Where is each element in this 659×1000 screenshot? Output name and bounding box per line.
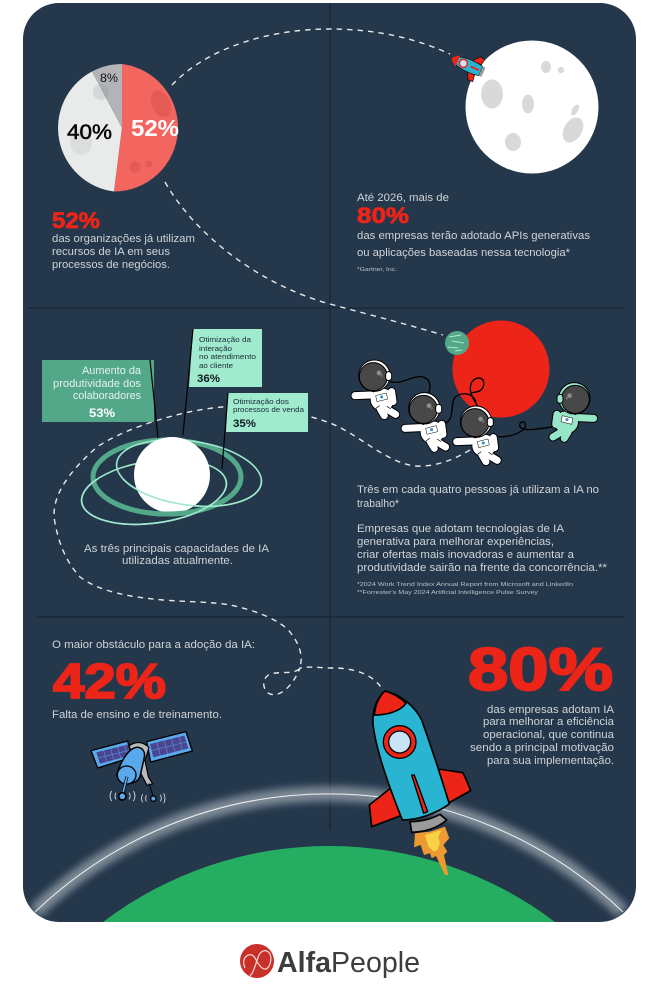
caption: capabilities: As três principais capacidades de IA xyxy=(84,543,270,555)
stat: 80% efficiency: operacional, que continua xyxy=(483,729,615,741)
source: *Gartner, Inc. xyxy=(357,267,398,273)
flame xyxy=(414,827,449,875)
callout: 53%: colaboradores xyxy=(73,390,141,402)
callout: 36%: interação xyxy=(199,344,232,353)
stat: 80% APIs xyxy=(357,192,591,273)
caption: capabilities xyxy=(84,543,270,567)
pie slice: 40% xyxy=(58,72,122,192)
slit xyxy=(412,775,428,813)
astronaut green xyxy=(553,383,594,438)
stat: 80% efficiency: para sua implementação. xyxy=(487,755,614,767)
pie slice: 8% xyxy=(92,64,122,128)
callout: 53%: 53% xyxy=(89,406,115,420)
stat: 80% efficiency xyxy=(468,636,615,767)
pie label 52%: 52% xyxy=(131,115,179,141)
callout: 35%: 35% xyxy=(233,418,256,430)
logo wordmark: AlfaPeople xyxy=(277,947,420,979)
text: workplace use: produtividade sairão na frente da concorrência.** xyxy=(357,562,608,574)
stat: 80% efficiency: sendo a principal motivação xyxy=(470,742,614,754)
pie chart xyxy=(58,64,179,192)
text: workplace use: *2024 Work Trend Index Annual Report from Microsoft and LinkedIn xyxy=(357,582,573,588)
nose xyxy=(374,691,406,715)
callout: 35% xyxy=(226,393,308,432)
stat number: 80% xyxy=(357,203,409,228)
pie slice: 52% xyxy=(114,64,178,192)
text: workplace use xyxy=(357,484,608,596)
stat: 52% organizations: processos de negócios. xyxy=(52,259,170,271)
text: workplace use: generativa para melhorar experiências, xyxy=(357,536,554,548)
callout: 36%: no atendimento xyxy=(199,352,256,361)
text: workplace use: Três em cada quatro pessoas já utilizam a IA no xyxy=(357,484,599,496)
dashed trajectory xyxy=(54,29,470,695)
tether xyxy=(390,377,553,437)
fins xyxy=(434,768,471,803)
stat description: das organizações já utilizam xyxy=(52,233,195,245)
icon: satellite xyxy=(91,732,192,803)
earth and atmosphere xyxy=(35,794,623,922)
callout: 36%: ao cliente xyxy=(199,361,233,370)
stat: 52% organizations xyxy=(52,208,195,271)
callout: 35%: Otimização dos xyxy=(233,397,289,406)
stat number: 52% xyxy=(52,208,100,233)
text: workplace use: Empresas que adotam tecnologias de IA xyxy=(357,523,565,535)
stat: 52% organizations: recursos de IA em seus xyxy=(52,246,171,258)
stat: 80% efficiency: para melhorar a eficiência xyxy=(483,716,615,728)
astronaut 1 xyxy=(355,360,396,416)
stat description: das empresas terão adotado APIs generativas xyxy=(357,230,591,242)
icon: large rocket xyxy=(369,691,471,875)
stat description: das empresas adotam IA xyxy=(487,704,615,716)
pie label 40%: 40% xyxy=(67,121,112,144)
astronaut 2 xyxy=(405,393,446,448)
callout: 36%: 36% xyxy=(197,373,220,385)
callout: 36%: Otimização da xyxy=(199,335,252,344)
window xyxy=(383,726,416,758)
nozzle xyxy=(410,814,447,832)
stat description: Falta de ensino e de treinamento. xyxy=(52,709,222,721)
callout: 53%: Aumento da xyxy=(82,365,142,377)
text: workplace use: **Forrester's May 2024 Artificial Intelligence Pulse Survey xyxy=(357,590,538,596)
body xyxy=(373,691,449,820)
text: workplace use: criar ofertas mais inovadoras e aumentar a xyxy=(357,549,575,561)
pie label 8%: 8% xyxy=(100,71,118,85)
ringed planet xyxy=(77,329,266,533)
callout: 53%: produtividade dos xyxy=(53,378,142,390)
logo xyxy=(240,944,420,979)
stat: 80% APIs: ou aplicações baseadas nessa tecnologia* xyxy=(357,247,571,259)
red planet xyxy=(452,320,550,418)
icon: small rocket xyxy=(446,46,489,84)
stat number: 42% xyxy=(53,655,166,709)
logo mark xyxy=(240,944,274,978)
intro text: Até 2026, mais de xyxy=(357,192,449,204)
callout: 35%: processos de venda xyxy=(233,405,305,414)
stat: 42% obstacle xyxy=(52,639,255,721)
callout: 36% xyxy=(189,329,262,387)
text: workplace use: trabalho* xyxy=(357,498,400,510)
astronauts with tether xyxy=(355,360,594,462)
stat number: 80% xyxy=(468,636,613,703)
callout: 53% xyxy=(42,360,154,422)
green planet xyxy=(445,331,469,355)
intro text: O maior obstáculo para a adoção da IA: xyxy=(52,639,255,651)
caption: capabilities: utilizadas atualmente. xyxy=(122,555,233,567)
astronaut 3 xyxy=(457,406,497,462)
moon xyxy=(466,40,598,174)
